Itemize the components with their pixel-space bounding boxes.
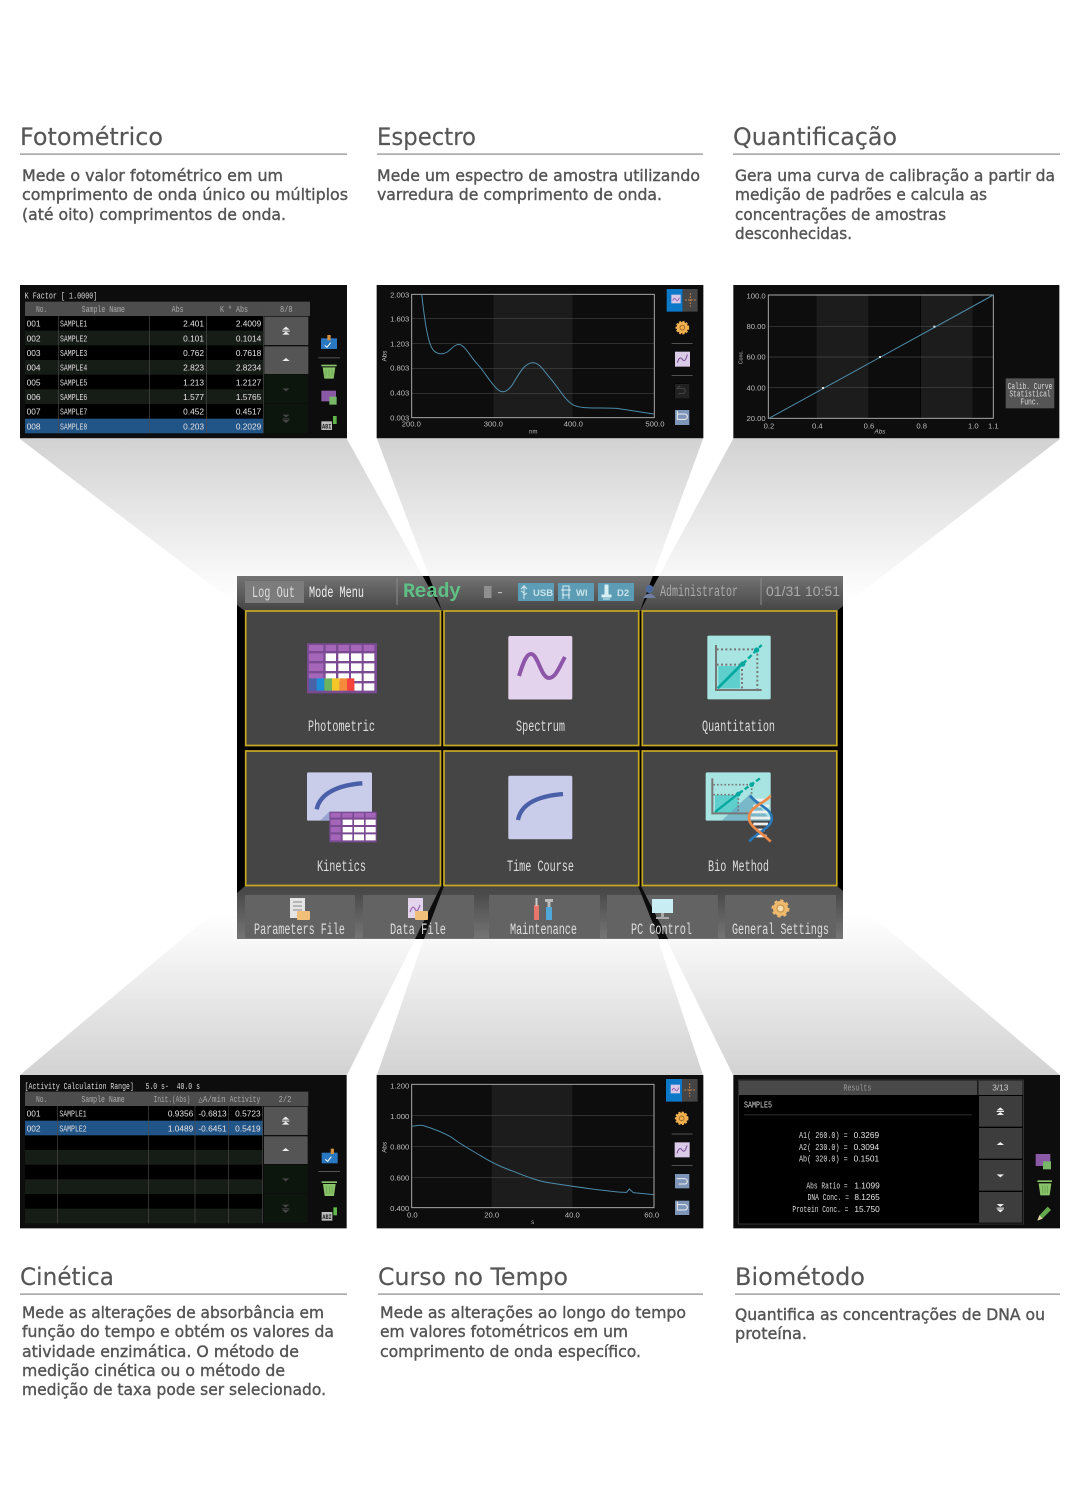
tile: Kinetics — [246, 751, 440, 886]
screen: photometric table: 002 — [27, 333, 41, 343]
screen: quantitation calibration curve: Func. — [1020, 398, 1040, 408]
screen: time course graph — [377, 1075, 703, 1228]
screen: kinetics table: 001 — [27, 1109, 41, 1119]
screen: kinetics table: Sample Name — [81, 1095, 125, 1105]
description — [22, 166, 348, 224]
tile: Spectrum — [444, 611, 639, 746]
screen: photometric table: 006 — [27, 392, 41, 402]
screen: quantitation calibration curve: 20.00 — [746, 414, 766, 423]
tile: Spectrum: Spectrum — [516, 718, 565, 736]
description: Mede um espectro de amostra utilizando — [377, 166, 700, 185]
description: medição cinética ou o método de — [22, 1361, 285, 1380]
screen: photometric table: Sample Name — [82, 305, 125, 315]
screen: photometric table: 007 — [27, 407, 41, 417]
heading: Cinética — [20, 1263, 114, 1291]
icon: gear — [773, 901, 788, 916]
heading: Quantificação — [733, 123, 897, 151]
screen: kinetics table: -0.6813 — [198, 1109, 227, 1119]
description: varredura de comprimento de onda. — [377, 185, 662, 204]
icon: calibration chart — [707, 636, 771, 699]
screen: kinetics table: 002 — [27, 1123, 41, 1133]
screen: bio method results: 8.1265 — [854, 1192, 880, 1202]
screen: quantitation calibration curve: 60.00 — [746, 353, 766, 362]
screen: spectrum graph: 1.603 — [390, 315, 409, 324]
screen: kinetics table: 2/2 — [279, 1095, 291, 1105]
heading: Biométodo — [735, 1263, 865, 1291]
screen: spectrum graph: 500.0 — [645, 420, 665, 429]
bottom bar: Maintenance — [510, 921, 577, 939]
screen: kinetics table: 0.9356 — [168, 1109, 194, 1119]
screen: bio method results: SAMPLE5 — [744, 1100, 772, 1110]
screen: photometric table: 005 — [27, 377, 41, 387]
top status bar: Log Out — [252, 584, 295, 602]
icon: table with rainbow — [307, 643, 377, 693]
section: Cinética — [20, 1263, 347, 1399]
icon: PC — [652, 899, 673, 919]
icon: data file — [408, 898, 428, 920]
screen: time course graph: s — [531, 1220, 534, 1226]
description: função do tempo e obtém os valores da — [22, 1322, 334, 1341]
description: Mede o valor fotométrico em um — [22, 166, 283, 185]
description: Quantifica as concentrações de DNA ou — [735, 1305, 1045, 1324]
screen: kinetics table: SAMPLE1 — [59, 1110, 87, 1120]
screen: photometric table: 003 — [27, 348, 41, 358]
screen: photometric table: K Factor [ 1.0000] — [25, 292, 97, 302]
funnel: bottom right — [640, 886, 1060, 1075]
description: em valores fotométricos em um — [380, 1322, 628, 1341]
screen: kinetics table: [Activity Calculation Range] 5.0 s- 40.0 s — [25, 1082, 200, 1092]
screen: kinetics table: 0.5723 — [235, 1109, 261, 1119]
screen: time course graph: 60.0 — [644, 1211, 659, 1220]
screen: photometric table: 001 — [27, 319, 41, 329]
screen: spectrum graph: 400.0 — [564, 420, 583, 429]
screen: spectrum graph: 0.003 — [390, 413, 409, 422]
bottom bar — [237, 886, 843, 939]
tile: Bio Method — [642, 751, 837, 886]
screen: photometric table: 008 — [27, 421, 41, 431]
icon: parameters file — [290, 898, 310, 920]
screen: quantitation calibration curve: Statistical — [1009, 390, 1051, 400]
top status bar: Mode Menu — [309, 584, 364, 602]
screen: time course graph: Abs — [382, 1142, 389, 1153]
tile: Photometric: Photometric — [308, 718, 375, 736]
screen: photometric table: ABI — [322, 423, 331, 431]
screen: photometric table: SAMPLE6 — [60, 393, 87, 403]
screen: photometric table: 8/8 — [280, 305, 293, 315]
screen: bio method results: Results — [843, 1084, 871, 1094]
screen: time course graph: 0.0 — [407, 1211, 418, 1220]
screen: bio method results: Ab( 320.0) = — [799, 1155, 848, 1165]
screen: photometric table: 0.452 — [183, 407, 204, 417]
screen: photometric table: 1.213 — [183, 377, 204, 387]
screen: kinetics table: -0.6451 — [198, 1123, 227, 1133]
screen: photometric table: SAMPLE5 — [60, 378, 87, 388]
screen: photometric table: SAMPLE2 — [60, 334, 87, 344]
description — [22, 1303, 334, 1399]
screen: quantitation calibration curve: 0.4 — [812, 421, 823, 430]
screen: quantitation calibration curve: 0.8 — [916, 421, 927, 430]
screen: spectrum graph: 300.0 — [484, 420, 503, 429]
description: medição de padrões e calcula as — [735, 185, 987, 204]
funnel: top right — [640, 439, 1060, 611]
screen: quantitation calibration curve: 80.00 — [746, 322, 766, 331]
screen: spectrum graph: 200.0 — [402, 420, 421, 429]
screen: photometric table: 0.2029 — [236, 421, 262, 431]
screen: photometric table: 1.5765 — [236, 392, 262, 402]
top status bar: Ready — [403, 581, 461, 604]
description: Gera uma curva de calibração a partir da — [735, 166, 1055, 185]
screen: photometric table: 2.4009 — [236, 319, 262, 329]
bottom bar: PC Control — [631, 921, 692, 939]
screen: kinetics table: SAMPLE2 — [59, 1124, 87, 1134]
screen: photometric table: SAMPLE8 — [60, 422, 87, 432]
top status bar: Administrator — [660, 583, 738, 601]
screen: quantitation calibration curve: 100.0 — [746, 291, 766, 300]
heading: Fotométrico — [20, 123, 163, 151]
screen: bio method results: 1.1099 — [854, 1180, 880, 1190]
screen: photometric table: 2.401 — [183, 319, 204, 329]
screen: kinetics table: 1.0489 — [168, 1123, 194, 1133]
description: atividade enzimática. O método de — [22, 1342, 299, 1361]
tile: Quantitation — [642, 611, 837, 746]
screen: spectrum graph: 0.403 — [390, 389, 409, 398]
description: Mede as alterações de absorbância em — [22, 1303, 324, 1322]
screen: photometric table: K * Abs — [220, 305, 248, 315]
section: Biométodo — [735, 1263, 1060, 1343]
screen: spectrum graph: Abs — [382, 351, 389, 361]
description: (até oito) comprimentos de onda. — [22, 205, 286, 224]
section: Espectro — [377, 123, 703, 204]
screen: spectrum graph: 0.803 — [390, 364, 409, 373]
screen: kinetics table: △A/min — [198, 1095, 226, 1105]
funnel: bottom centre — [377, 886, 703, 1075]
screen: spectrum graph: nm — [529, 429, 537, 435]
section: Fotométrico — [20, 123, 348, 224]
screen: photometric table: 0.4517 — [236, 407, 262, 417]
funnel: bottom left — [20, 886, 442, 1075]
screen: photometric table: 0.1014 — [236, 333, 262, 343]
screen: quantitation calibration curve: 40.00 — [746, 383, 766, 392]
bottom bar: General Settings — [732, 921, 829, 939]
section: Quantificação — [733, 123, 1060, 243]
screen: kinetics table: ABI — [322, 1213, 332, 1221]
screen: bio method results: A1( 260.0) = — [799, 1131, 848, 1141]
funnel: top centre — [377, 439, 703, 611]
screen: photometric table: 0.203 — [183, 421, 204, 431]
heading: Espectro — [377, 123, 476, 151]
screen: time course graph: 20.0 — [484, 1211, 499, 1220]
description — [377, 166, 700, 204]
screen: photometric table — [20, 285, 347, 438]
description: concentrações de amostras — [735, 205, 946, 224]
screen: quantitation calibration curve: Calib. Curve — [1008, 382, 1052, 392]
screen: photometric table: SAMPLE3 — [60, 349, 87, 359]
screen: bio method results: Protein Conc. = — [792, 1205, 848, 1215]
description: medição de taxa pode ser selecionado. — [22, 1380, 326, 1399]
tile: Time Course: Time Course — [507, 858, 574, 876]
screen: bio method results: A2( 230.0) = — [799, 1143, 848, 1153]
screen: photometric table: SAMPLE1 — [60, 320, 87, 330]
screen: bio method results: 0.1501 — [854, 1154, 880, 1164]
top status bar: D2 — [617, 588, 629, 599]
top status bar: 01/31 10:51 — [766, 583, 840, 599]
top status bar: WI — [576, 588, 588, 599]
screen: bio method results: 0.3269 — [854, 1130, 880, 1140]
main screen: Mode Menu — [237, 576, 843, 939]
screen: quantitation calibration curve: 1.0 — [968, 421, 979, 430]
screen: time course graph: 0.800 — [390, 1142, 409, 1151]
screen: time course graph: 1.000 — [390, 1112, 409, 1121]
screen: time course graph: 1.200 — [390, 1081, 409, 1090]
description: desconhecidas. — [735, 224, 852, 243]
screen: time course graph: 40.0 — [565, 1211, 580, 1220]
screen: photometric table: 0.7618 — [236, 348, 262, 358]
description — [735, 166, 1055, 243]
description: Mede as alterações ao longo do tempo — [380, 1303, 686, 1322]
screen: bio method results: 3/13 — [992, 1083, 1009, 1093]
screen: quantitation calibration curve: 0.6 — [864, 421, 874, 430]
screen: photometric table: 0.762 — [183, 348, 204, 358]
screen: photometric table: SAMPLE7 — [60, 408, 87, 418]
description: comprimento de onda único ou múltiplos — [22, 185, 348, 204]
icon: time course curve — [508, 776, 572, 839]
screen: photometric table: Abs — [172, 305, 184, 315]
screen: quantitation calibration curve — [733, 285, 1059, 438]
heading: Curso no Tempo — [378, 1263, 568, 1291]
screen: time course graph: 0.400 — [390, 1204, 409, 1213]
screen: kinetics table: 0.5419 — [235, 1123, 261, 1133]
screen: bio method results: 15.750 — [854, 1204, 880, 1214]
icon: chart with DNA helix — [706, 772, 772, 842]
bottom bar: Parameters File — [254, 921, 345, 939]
tile: Bio Method: Bio Method — [708, 858, 769, 876]
tile: Time Course — [444, 751, 639, 886]
description — [735, 1305, 1045, 1343]
icon: kinetics curve and table — [307, 772, 377, 842]
funnel: top left — [20, 439, 442, 611]
screen: photometric table: 1.577 — [183, 392, 204, 402]
screen: photometric table: 1.2127 — [236, 377, 262, 387]
description: proteína. — [735, 1324, 807, 1343]
screen: photometric table: 2.8234 — [236, 363, 262, 373]
screen: quantitation calibration curve: 0.2 — [764, 421, 774, 430]
screen: kinetics table: No. — [36, 1095, 47, 1105]
description — [380, 1303, 686, 1361]
screen: spectrum graph: 2.003 — [390, 291, 409, 300]
icon: spectrum wave — [508, 636, 572, 700]
section: Curso no Tempo — [378, 1263, 703, 1361]
screen: time course graph: 0.600 — [390, 1173, 409, 1182]
top status bar — [237, 576, 843, 611]
screen: photometric table: 0.101 — [183, 333, 204, 343]
screen: photometric table: 004 — [27, 363, 41, 373]
tile: Quantitation: Quantitation — [702, 718, 775, 736]
screen: photometric table: 2.823 — [183, 363, 204, 373]
screen: bio method results: 0.3094 — [854, 1142, 880, 1152]
screen: quantitation calibration curve: Conc. — [738, 350, 744, 364]
screen: quantitation calibration curve: Abs — [874, 429, 886, 436]
screen: quantitation calibration curve: 1.1 — [988, 421, 999, 430]
tile: Kinetics: Kinetics — [317, 858, 366, 876]
screen: bio method results — [733, 1075, 1060, 1228]
screen: bio method results: Abs Ratio = — [806, 1181, 848, 1191]
screen: photometric table: No. — [36, 305, 47, 315]
screen: bio method results: DNA Conc. = — [808, 1193, 849, 1203]
screen: spectrum graph: 1.203 — [390, 339, 409, 348]
screen: spectrum graph — [377, 285, 703, 438]
tile: Photometric — [246, 611, 440, 746]
screen: kinetics table: Activity — [230, 1095, 261, 1105]
description: comprimento de onda específico. — [380, 1342, 641, 1361]
screen: photometric table: SAMPLE4 — [60, 364, 87, 374]
screen: kinetics table — [20, 1075, 347, 1228]
icon: maintenance — [534, 898, 553, 920]
bottom bar: Data File — [390, 921, 446, 939]
screen: kinetics table: Init.(Abs) — [154, 1095, 190, 1105]
top status bar: USB — [533, 588, 553, 599]
